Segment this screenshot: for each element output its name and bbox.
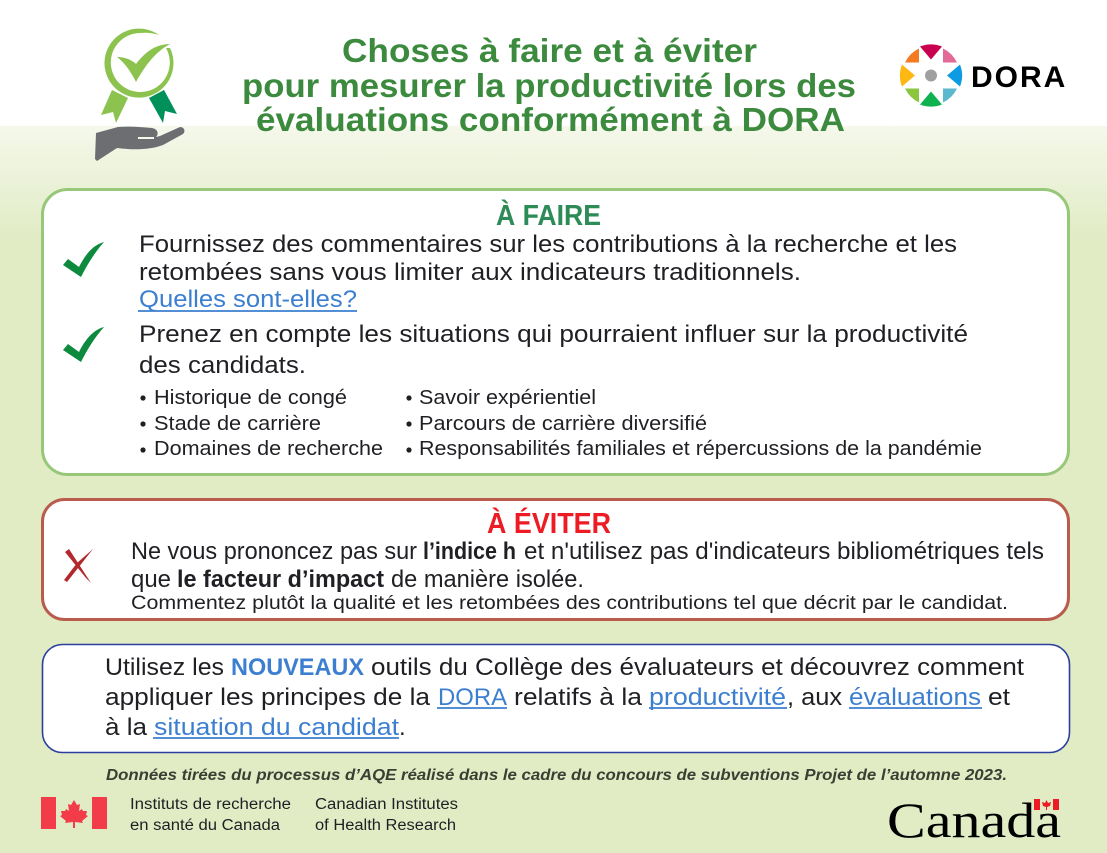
- panel: nouveaux outils: [42, 644, 1070, 752]
- panel: à faire: [42, 190, 1068, 474]
- text: tools message: productivité: [649, 684, 786, 711]
- text: English name: [315, 796, 458, 834]
- text: French name: en santé du Canada: [130, 817, 280, 834]
- list: left column: Stade de carrière: [154, 413, 321, 435]
- text: warning: de manière isolée.: [391, 566, 584, 593]
- logo: Canada wordmark: Canada: [887, 792, 1061, 848]
- text: second item: Prenez en compte les situations qui pourraient influer sur la productivité: [139, 321, 968, 348]
- text: tools message: NOUVEAUX: [231, 654, 364, 681]
- text: tools message: outils du Collège des évaluateurs et découvrez comment: [371, 654, 1024, 681]
- title: pour mesurer la productivité lors des: [242, 67, 856, 104]
- text: tools message: Utilisez les: [105, 654, 224, 681]
- title: [242, 32, 856, 138]
- list: left column: [140, 387, 383, 460]
- text: tools message: situation du candidat: [154, 714, 399, 741]
- text: first item: Fournissez des commentaires sur les contributions à la recherche et les: [139, 231, 957, 258]
- text: tools message: .: [399, 714, 406, 741]
- text: English name: Canadian Institutes: [315, 796, 458, 813]
- wordmark: DORA: [971, 61, 1067, 94]
- text: French name: Instituts de recherche: [130, 796, 291, 813]
- text: second item: des candidats.: [139, 352, 306, 379]
- text: French name: [130, 796, 291, 834]
- list: right column: [406, 387, 982, 460]
- logo: CIHR: [41, 796, 458, 834]
- icon: small flag: [1034, 799, 1059, 810]
- icon: DORA star wheel: [900, 44, 962, 107]
- list: right column: Parcours de carrière diversifié: [419, 413, 707, 435]
- text: tools message: évaluations: [849, 684, 981, 711]
- text: tools message: , aux: [787, 684, 842, 711]
- panel: à éviter: [42, 500, 1068, 620]
- text: warning: l’indice h: [423, 538, 516, 565]
- heading: à éviter: À ÉVITER: [487, 506, 611, 540]
- logo: DORA: [900, 44, 1067, 107]
- source note: Données tirées du processus d’AQE réalisé dans le cadre du concours de subventions Projet de l’automne 2023.: [106, 767, 1007, 784]
- icon: Canadian flag: [41, 797, 107, 829]
- text: warning: Commentez plutôt la qualité et les retombées des contributions tel que décrit par le candidat.: [131, 593, 1008, 614]
- text: warning: Ne vous prononcez pas sur: [131, 538, 417, 565]
- text: warning: que: [131, 566, 171, 593]
- text: tools message: relatifs à la: [514, 684, 643, 711]
- text: English name: of Health Research: [315, 817, 456, 834]
- icon: red cross: [64, 549, 93, 583]
- list: left column: Domaines de recherche: [154, 438, 383, 460]
- text: tools message: appliquer les principes de la: [105, 684, 431, 711]
- text: warning: [131, 538, 1044, 614]
- icon: award ribbon with check and hand: [95, 29, 184, 161]
- text: tools message: DORA: [438, 684, 507, 711]
- text: first item: [138, 231, 957, 313]
- title: évaluations conformément à DORA: [256, 101, 845, 138]
- text: first item: Quelles sont-elles?: [139, 286, 357, 313]
- text: warning: le facteur d’impact: [177, 566, 384, 593]
- text: second item: [139, 321, 968, 379]
- icon: check mark 2: [63, 327, 104, 362]
- list: right column: Responsabilités familiales et répercussions de la pandémie: [419, 438, 982, 460]
- text: tools message: et: [988, 684, 1010, 711]
- icon: check mark 1: [63, 242, 104, 277]
- heading: à faire: À FAIRE: [496, 198, 601, 232]
- text: tools message: [105, 654, 1024, 741]
- list: left column: Historique de congé: [154, 387, 347, 409]
- text: warning: et n'utilisez pas d'indicateurs bibliométriques tels: [524, 538, 1044, 565]
- list: right column: Savoir expérientiel: [419, 387, 596, 409]
- title: Choses à faire et à éviter: [342, 32, 757, 69]
- text: tools message: à la: [105, 714, 148, 741]
- text: first item: retombées sans vous limiter aux indicateurs traditionnels.: [139, 259, 801, 286]
